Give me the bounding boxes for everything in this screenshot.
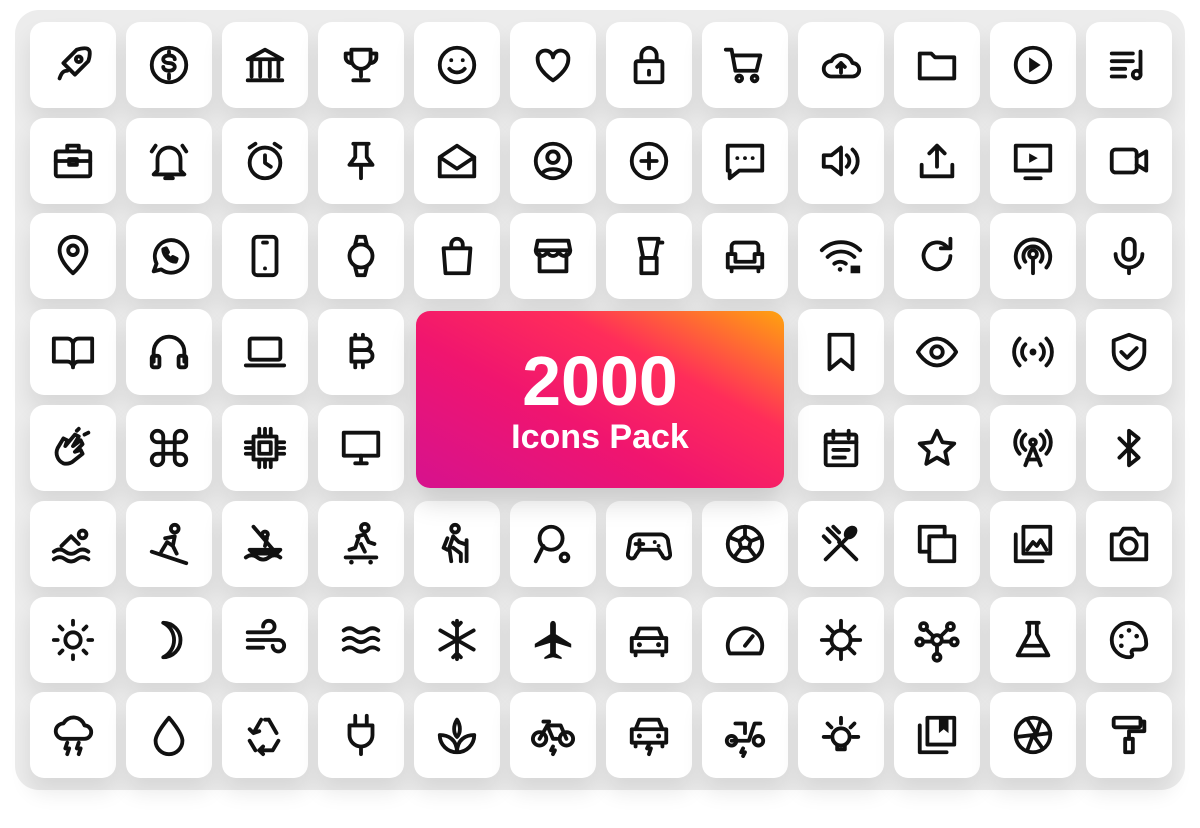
icon: swim <box>30 501 116 587</box>
icon: car <box>606 597 692 683</box>
icon: chat <box>702 118 788 204</box>
icon: monitor <box>318 405 404 491</box>
icon: plug <box>318 692 404 778</box>
icon: e-bike <box>510 692 596 778</box>
icon: broadcast <box>990 309 1076 395</box>
banner: 2000 Icons Pack <box>416 311 784 488</box>
icon: wifi lock <box>798 213 884 299</box>
icon: hiking <box>414 501 500 587</box>
icon: folder <box>894 22 980 108</box>
banner subtitle: Icons Pack <box>511 418 689 456</box>
icon: bank <box>222 22 308 108</box>
icon: mail <box>414 118 500 204</box>
icon: copy <box>894 501 980 587</box>
icon: bookmark <box>798 309 884 395</box>
icon: camera <box>1086 501 1172 587</box>
icon: book <box>30 309 116 395</box>
icon: waves <box>318 597 404 683</box>
icon: command <box>126 405 212 491</box>
icon: cart <box>702 22 788 108</box>
icon: mic <box>1086 213 1172 299</box>
icon: storm <box>30 692 116 778</box>
icon: refresh <box>894 213 980 299</box>
icon: paint roller <box>1086 692 1172 778</box>
icon: snowflake <box>414 597 500 683</box>
icon: bell <box>126 118 212 204</box>
icon: recycle <box>222 692 308 778</box>
icon: laptop <box>222 309 308 395</box>
icon: soccer <box>702 501 788 587</box>
icon: palette <box>1086 597 1172 683</box>
icon: gamepad <box>606 501 692 587</box>
icon: plant <box>414 692 500 778</box>
icon: playlist <box>1086 22 1172 108</box>
icon: virus <box>798 597 884 683</box>
icon: location <box>30 213 116 299</box>
icon: store <box>510 213 596 299</box>
icon: user <box>510 118 596 204</box>
icon: aperture <box>990 692 1076 778</box>
icon: alarm <box>222 118 308 204</box>
icon: drop <box>126 692 212 778</box>
icon: antenna <box>990 405 1076 491</box>
icon: cloud upload <box>798 22 884 108</box>
icon: phone <box>222 213 308 299</box>
icon: bookmarks <box>894 692 980 778</box>
icon: sun <box>30 597 116 683</box>
icon: e-car <box>606 692 692 778</box>
icon: plus <box>606 118 692 204</box>
icon: star <box>894 405 980 491</box>
icon: whatsapp <box>126 213 212 299</box>
icon: dollar <box>126 22 212 108</box>
icon: bitcoin <box>318 309 404 395</box>
icon: flask <box>990 597 1076 683</box>
banner number: 2000 <box>522 342 678 420</box>
icon: speaker <box>798 118 884 204</box>
icon: watch <box>318 213 404 299</box>
icon: wind <box>222 597 308 683</box>
icon: play <box>990 22 1076 108</box>
icon: headphones <box>126 309 212 395</box>
icon: blender <box>606 213 692 299</box>
icon: smiley <box>414 22 500 108</box>
icon: heart <box>510 22 596 108</box>
icon: fork spoon <box>798 501 884 587</box>
icon: rocket <box>30 22 116 108</box>
icon: network <box>894 597 980 683</box>
icon: gauge <box>702 597 788 683</box>
icon: pin <box>318 118 404 204</box>
icon: trophy <box>318 22 404 108</box>
icon: tennis <box>510 501 596 587</box>
icon: bluetooth <box>1086 405 1172 491</box>
icon: sofa <box>702 213 788 299</box>
icon: bag <box>414 213 500 299</box>
icon: tv <box>990 118 1076 204</box>
icon: ski <box>126 501 212 587</box>
icon: eye <box>894 309 980 395</box>
icon: moon <box>126 597 212 683</box>
icon: calendar <box>798 405 884 491</box>
icon: briefcase <box>30 118 116 204</box>
icon: upload <box>894 118 980 204</box>
icon: clap <box>30 405 116 491</box>
icon: chip <box>222 405 308 491</box>
icon: kayak <box>222 501 308 587</box>
icon: skateboard <box>318 501 404 587</box>
icon: scooter <box>702 692 788 778</box>
icon: shield <box>1086 309 1172 395</box>
icon: podcast <box>990 213 1076 299</box>
icon: video <box>1086 118 1172 204</box>
icon: images <box>990 501 1076 587</box>
icon: plane <box>510 597 596 683</box>
icon: bulb <box>798 692 884 778</box>
icon: lock <box>606 22 692 108</box>
